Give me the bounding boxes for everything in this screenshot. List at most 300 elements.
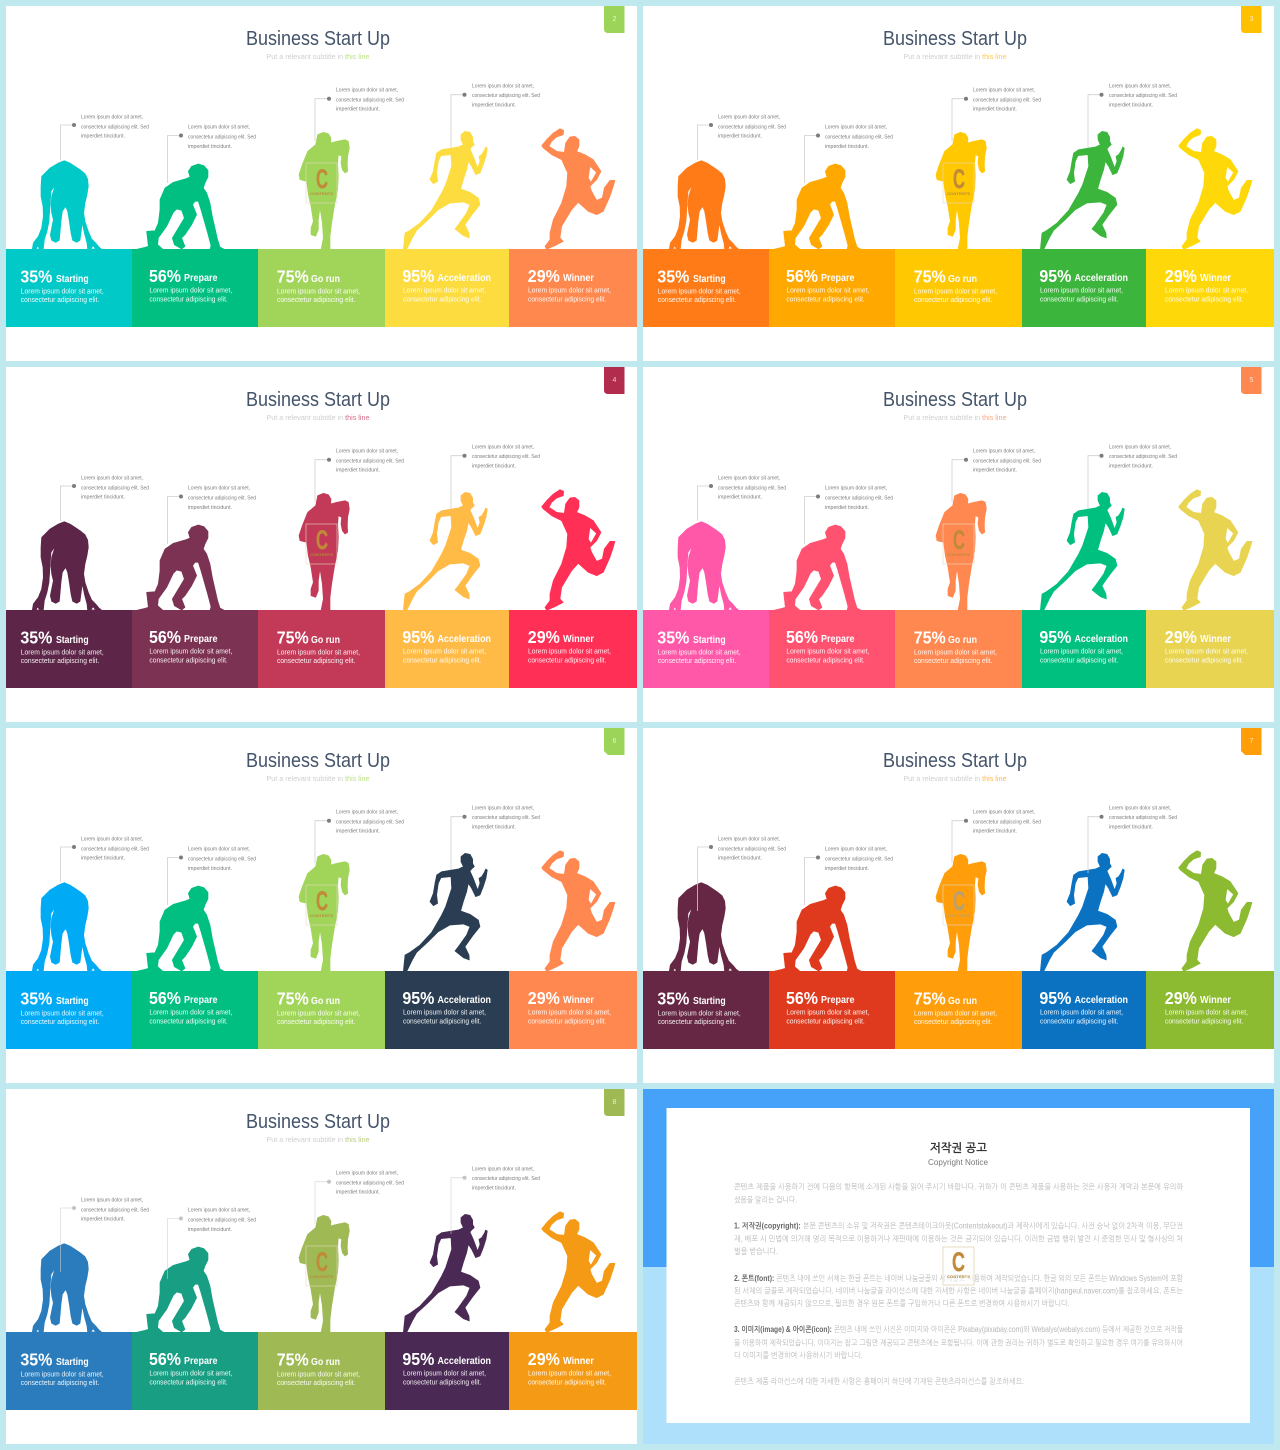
callout 4: imperdiet tincidunt. <box>472 825 516 831</box>
callout 4: Lorem ipsum dolor sit amet, <box>1109 84 1171 90</box>
callout 3: consectetur adipiscing elit. Sed <box>973 98 1041 104</box>
icon: front running figure <box>299 854 349 972</box>
subtitle: Put a relevant subtitle in this line <box>266 415 370 422</box>
stat: 75% Go run: 75% <box>914 267 946 287</box>
icon: front running figure <box>936 493 986 611</box>
icon: preparing runner <box>135 886 225 972</box>
callout 3: consectetur adipiscing elit. Sed <box>973 820 1041 826</box>
watermark: CONTENTS <box>947 1274 970 1279</box>
stat: 35% Starting: consectetur adipiscing elit. <box>658 1019 736 1026</box>
stat: 29% Winner: Winner <box>563 994 594 1006</box>
watermark: CONTENTS <box>310 913 333 918</box>
stat: 56% Prepare: Lorem ipsum dolor sit amet, <box>786 1010 869 1017</box>
text block: copyright clause: 재, 배포 시 민법에 의거해 영리 목적으로 이용하거나 재판매에 이용하는 것은 금지되어 있습니다. 이러한 금법 행위 발견 시 준엄한 민사 및 형사상의 처 <box>734 1235 1183 1244</box>
stat: 35% Starting: Lorem ipsum dolor sit amet, <box>658 288 741 295</box>
text block: intro: 콘텐츠 제품을 사용하기 전에 다음의 항목에 소개된 사항을 읽어 주시기 바랍니다. 귀하가 이 콘텐츠 제품을 사용하는 것은 사용자 계약과 본문에 유의하 <box>734 1182 1183 1192</box>
text block: image clause <box>734 1325 1183 1360</box>
icon: preparing runner <box>135 164 225 250</box>
page tab <box>1241 6 1262 33</box>
callout 4 <box>1088 444 1177 512</box>
stat: 95% Acceleration <box>385 971 509 1049</box>
watermark: C <box>316 1247 328 1277</box>
page tab: 2 <box>613 16 617 23</box>
stat: 75% Go run: consectetur adipiscing elit. <box>277 1380 355 1387</box>
callout 2: consectetur adipiscing elit. Sed <box>825 496 893 502</box>
stat: 56% Prepare: Prepare <box>821 272 855 284</box>
panel: slide 8 <box>6 1089 637 1444</box>
panel: copyright notice <box>643 1089 1274 1444</box>
text block: font clause: 콘텐츠와 함께 제공되지 않으므로, 필요한 경우 원본 폰트를 구입하거나 다른 폰트로 변경하여 사용하시기 바랍니다. <box>734 1299 1070 1308</box>
icon: winner figure <box>542 851 615 971</box>
stat: 35% Starting: consectetur adipiscing elit. <box>658 297 736 304</box>
title: Business Start Up <box>246 389 390 411</box>
text block: copyright clause: 1. 저작권(copyright): 본문 콘텐츠의 소유 및 저작권은 콘텐츠테이크아웃(Contentstakeout)과 제작사에게 있습니다. 사전 승낙 없이 2차적 이용, 무단전 <box>734 1221 1183 1230</box>
text block: font clause: 된 서체의 글꼴로 제작되었습니다. 네이버 나눔글꼴 라이선스에 대한 자세한 사항은 네이버 나눔글꼴 홈페이지(hangeul.naver.com)를 참조하세요. 폰트는 <box>734 1287 1183 1296</box>
stat: 56% Prepare: 56% <box>786 988 818 1008</box>
callout 3 <box>952 448 1041 502</box>
icon: sprinting figure <box>1040 131 1124 250</box>
stat: 75% Go run: Lorem ipsum dolor sit amet, <box>277 288 360 295</box>
stat: 56% Prepare: 56% <box>149 988 181 1008</box>
icon: preparing runner <box>772 886 862 972</box>
title: Business Start Up <box>883 28 1027 50</box>
subtitle: Put a relevant subtitle in this line <box>904 415 1007 422</box>
stat: 56% Prepare <box>132 971 258 1049</box>
callout 3 <box>315 810 404 863</box>
stat: 56% Prepare: Prepare <box>184 1355 218 1367</box>
stat: 56% Prepare: Lorem ipsum dolor sit amet, <box>149 1371 232 1378</box>
icon: front running figure <box>299 493 349 611</box>
page tab: 8 <box>613 1099 617 1106</box>
stat: 95% Acceleration: Lorem ipsum dolor sit amet, <box>1040 649 1123 656</box>
stat: 75% Go run <box>895 610 1022 688</box>
callout 1: Lorem ipsum dolor sit amet, <box>81 475 143 481</box>
watermark <box>943 524 974 564</box>
watermark <box>306 524 337 564</box>
stat: 75% Go run: consectetur adipiscing elit. <box>914 658 992 665</box>
callout 2: Lorem ipsum dolor sit amet, <box>188 1208 250 1214</box>
callout 4: Lorem ipsum dolor sit amet, <box>472 1166 534 1172</box>
callout 1: consectetur adipiscing elit. Sed <box>718 485 786 491</box>
callout 3 <box>315 1170 404 1224</box>
callout 3 <box>315 448 404 502</box>
callout 2: Lorem ipsum dolor sit amet, <box>825 847 887 853</box>
stat: 29% Winner: consectetur adipiscing elit. <box>528 657 606 664</box>
stat: 75% Go run: consectetur adipiscing elit. <box>914 297 992 304</box>
callout 4: consectetur adipiscing elit. Sed <box>1109 454 1177 460</box>
stat: 95% Acceleration: consectetur adipiscing elit. <box>403 1379 481 1386</box>
stat: 95% Acceleration <box>385 249 509 327</box>
callout 4: imperdiet tincidunt. <box>1109 103 1153 109</box>
icon: sprinting figure <box>403 853 487 972</box>
stat: 95% Acceleration: Lorem ipsum dolor sit amet, <box>403 649 486 656</box>
callout 2: consectetur adipiscing elit. Sed <box>188 496 256 502</box>
stat: 75% Go run: Lorem ipsum dolor sit amet, <box>277 649 360 656</box>
callout 3: imperdiet tincidunt. <box>973 107 1017 113</box>
stat: 75% Go run <box>258 971 385 1049</box>
page tab: 5 <box>1250 377 1254 384</box>
stat: 95% Acceleration: 95% <box>402 627 435 647</box>
page tab: 6 <box>613 738 617 745</box>
watermark <box>306 1246 337 1286</box>
title: Business Start Up <box>246 1111 390 1133</box>
callout 4: Lorem ipsum dolor sit amet, <box>472 84 534 90</box>
icon: crouching runner <box>669 161 739 250</box>
stat: 29% Winner: consectetur adipiscing elit. <box>528 296 606 303</box>
stat: 75% Go run: Lorem ipsum dolor sit amet, <box>277 1010 360 1017</box>
callout 1: imperdiet tincidunt. <box>718 134 762 140</box>
watermark: CONTENTS <box>310 1274 333 1279</box>
text block: font clause <box>734 1274 1183 1308</box>
stat: 35% Starting <box>6 249 132 327</box>
stat: 56% Prepare: consectetur adipiscing elit. <box>786 296 865 303</box>
callout 1: consectetur adipiscing elit. Sed <box>718 124 786 130</box>
text block: image clause: 을 이용하여 제작되었습니다. 이미지는 참고 그림만 제공되고 콘텐츠에는 포함됩니다. 이에 관한 권리는 귀하가 별도로 확인하고 필요한 경우 여기를 유의하시어 <box>734 1339 1183 1348</box>
watermark <box>306 163 337 203</box>
stat: 75% Go run <box>895 249 1022 327</box>
callout 2: imperdiet tincidunt. <box>188 1227 232 1233</box>
icon: front running figure <box>299 1215 349 1333</box>
stat: 95% Acceleration: Acceleration <box>438 633 491 645</box>
subtitle: Put a relevant subtitle in this line <box>266 54 370 61</box>
stat: 29% Winner: Lorem ipsum dolor sit amet, <box>1165 288 1248 295</box>
stat: 95% Acceleration <box>1022 249 1146 327</box>
stat: 75% Go run: Go run <box>311 273 340 285</box>
text block: image clause: 다 이미지를 변경하여 사용하시기 바랍니다. <box>734 1351 862 1360</box>
stat: 95% Acceleration: consectetur adipiscing elit. <box>1040 1018 1118 1025</box>
heading: Copyright Notice: Copyright Notice <box>928 1157 988 1167</box>
stat: 56% Prepare <box>132 1332 258 1410</box>
callout 3: imperdiet tincidunt. <box>973 829 1017 835</box>
callout 1: consectetur adipiscing elit. Sed <box>81 1207 149 1213</box>
callout 3: consectetur adipiscing elit. Sed <box>336 458 404 464</box>
callout 1: consectetur adipiscing elit. Sed <box>81 124 149 130</box>
callout 2: imperdiet tincidunt. <box>825 505 869 511</box>
page tab: 4 <box>613 377 617 384</box>
stat: 29% Winner: Winner <box>1200 633 1231 645</box>
stat: 35% Starting: Lorem ipsum dolor sit amet, <box>21 649 104 656</box>
stat: 29% Winner <box>1146 249 1274 327</box>
callout 4: consectetur adipiscing elit. Sed <box>472 454 540 460</box>
callout 2: imperdiet tincidunt. <box>825 144 869 150</box>
callout 1: consectetur adipiscing elit. Sed <box>81 846 149 852</box>
callout 4 <box>1088 806 1177 873</box>
page tab <box>1241 728 1262 755</box>
stat: 56% Prepare: Prepare <box>184 994 218 1006</box>
icon: crouching runner <box>669 522 739 611</box>
callout 3: consectetur adipiscing elit. Sed <box>336 1180 404 1186</box>
stat: 29% Winner: Lorem ipsum dolor sit amet, <box>528 649 611 656</box>
stat: 29% Winner <box>1146 971 1274 1049</box>
stat: 56% Prepare: consectetur adipiscing elit. <box>786 1018 865 1025</box>
stat: 95% Acceleration: Acceleration <box>438 272 491 284</box>
callout 3: Lorem ipsum dolor sit amet, <box>336 448 398 454</box>
stat: 75% Go run: Go run <box>948 634 977 646</box>
stat: 35% Starting: consectetur adipiscing elit. <box>21 658 99 665</box>
stat: 35% Starting <box>6 971 132 1049</box>
watermark: C <box>953 525 965 555</box>
stat: 95% Acceleration: Acceleration <box>438 994 491 1006</box>
stat: 29% Winner: 29% <box>528 1349 560 1369</box>
stat: 56% Prepare: Lorem ipsum dolor sit amet, <box>149 649 232 656</box>
callout 1: Lorem ipsum dolor sit amet, <box>81 1197 143 1203</box>
icon: winner figure <box>542 490 615 610</box>
stat: 35% Starting: 35% <box>657 628 690 648</box>
watermark: C <box>952 1247 965 1277</box>
callout 2 <box>168 486 256 544</box>
stat: 95% Acceleration: Lorem ipsum dolor sit amet, <box>403 1010 486 1017</box>
callout 3 <box>952 810 1041 863</box>
icon: winner figure <box>542 1212 615 1332</box>
panel: slide 2 <box>6 6 637 361</box>
text block: image clause: 3. 이미지(image) & 아이콘(icon): 콘텐츠 내에 쓰인 사진은 이미지와 아이콘은 Pixabay(pixabay.com)와 Webalys(webalys.com) 등에서 제공한 것으로 저작물 <box>734 1325 1183 1334</box>
stat: 56% Prepare: 56% <box>149 1349 181 1369</box>
icon: crouching runner <box>32 161 102 250</box>
callout 1: imperdiet tincidunt. <box>718 856 762 862</box>
watermark <box>943 1247 974 1285</box>
stat: 75% Go run: 75% <box>277 1350 309 1370</box>
watermark: C <box>953 886 965 916</box>
stat: 35% Starting: Lorem ipsum dolor sit amet, <box>658 1010 741 1017</box>
stat: 56% Prepare <box>769 971 895 1049</box>
callout 2: consectetur adipiscing elit. Sed <box>188 135 256 141</box>
stat: 95% Acceleration: 95% <box>402 1349 435 1369</box>
stat: 56% Prepare: Lorem ipsum dolor sit amet, <box>149 1010 232 1017</box>
stat: 56% Prepare: 56% <box>149 627 181 647</box>
stat: 75% Go run: 75% <box>277 267 309 287</box>
stat: 95% Acceleration <box>385 610 509 688</box>
stat: 35% Starting: Starting <box>693 273 726 285</box>
stat: 95% Acceleration: 95% <box>1039 627 1072 647</box>
callout 1: Lorem ipsum dolor sit amet, <box>718 475 780 481</box>
subtitle: Put a relevant subtitle in this line <box>266 1137 370 1144</box>
title: Business Start Up <box>883 750 1027 772</box>
icon: front running figure <box>936 854 986 972</box>
stat: 29% Winner: consectetur adipiscing elit. <box>528 1018 606 1025</box>
stat: 29% Winner: consectetur adipiscing elit. <box>1165 1018 1243 1025</box>
watermark <box>306 885 337 925</box>
stat: 95% Acceleration: consectetur adipiscing elit. <box>1040 657 1118 664</box>
stat: 35% Starting: Starting <box>56 634 89 646</box>
watermark: CONTENTS <box>310 191 333 196</box>
icon: crouching runner <box>669 883 739 972</box>
callout 4: imperdiet tincidunt. <box>472 1186 516 1192</box>
callout 1 <box>698 114 786 160</box>
stat: 95% Acceleration: consectetur adipiscing elit. <box>403 1018 481 1025</box>
icon: crouching runner <box>32 1244 102 1333</box>
stat: 75% Go run: Go run <box>311 634 340 646</box>
stat: 35% Starting: Lorem ipsum dolor sit amet, <box>658 649 741 656</box>
stat: 29% Winner: Winner <box>1200 272 1231 284</box>
stat: 56% Prepare: consectetur adipiscing elit. <box>149 657 228 664</box>
text block: copyright clause: 벌을 받습니다. <box>734 1247 778 1256</box>
callout 3: imperdiet tincidunt. <box>336 829 380 835</box>
stat: 75% Go run: Lorem ipsum dolor sit amet, <box>914 1010 997 1017</box>
stat: 29% Winner: Lorem ipsum dolor sit amet, <box>1165 1010 1248 1017</box>
stat: 95% Acceleration: consectetur adipiscing elit. <box>403 657 481 664</box>
callout 2: imperdiet tincidunt. <box>188 505 232 511</box>
callout 4: consectetur adipiscing elit. Sed <box>1109 815 1177 821</box>
stat: 35% Starting: Starting <box>56 273 89 285</box>
stat: 56% Prepare: Lorem ipsum dolor sit amet, <box>786 649 869 656</box>
callout 2 <box>168 125 256 183</box>
stat: 95% Acceleration: Acceleration <box>1074 272 1128 284</box>
panel: slide 7 <box>643 728 1274 1083</box>
stat: 75% Go run: consectetur adipiscing elit. <box>277 297 355 304</box>
callout 3: imperdiet tincidunt. <box>336 107 380 113</box>
text block: closing note: 콘텐츠 제품 라이선스에 대한 자세한 사항은 홈페이지 하단에 기재된 콘텐츠라이선스를 참조하세요. <box>734 1377 1024 1386</box>
watermark: C <box>316 525 328 555</box>
stat: 75% Go run: Go run <box>311 1356 340 1368</box>
stat: 29% Winner: Lorem ipsum dolor sit amet, <box>528 1010 611 1017</box>
icon: preparing runner <box>135 1247 225 1333</box>
callout 2 <box>168 847 256 905</box>
panel: slide 5 <box>643 367 1274 722</box>
stat: 56% Prepare: consectetur adipiscing elit. <box>149 296 228 303</box>
stat: 29% Winner: 29% <box>1165 988 1197 1008</box>
stat: 95% Acceleration <box>1022 610 1146 688</box>
callout 1: consectetur adipiscing elit. Sed <box>718 846 786 852</box>
panel: slide 3 <box>643 6 1274 361</box>
stat: 56% Prepare: Prepare <box>184 633 218 645</box>
callout 2 <box>804 125 893 183</box>
stat: 75% Go run: Lorem ipsum dolor sit amet, <box>914 649 997 656</box>
stat: 29% Winner: Lorem ipsum dolor sit amet, <box>1165 649 1248 656</box>
icon: sprinting figure <box>403 1214 487 1333</box>
callout 2: imperdiet tincidunt. <box>188 866 232 872</box>
callout 3: Lorem ipsum dolor sit amet, <box>336 810 398 816</box>
icon: sprinting figure <box>1040 853 1124 972</box>
stat: 75% Go run: Lorem ipsum dolor sit amet, <box>277 1371 360 1378</box>
callout 1: imperdiet tincidunt. <box>81 495 125 501</box>
stat: 95% Acceleration: consectetur adipiscing elit. <box>403 296 481 303</box>
stat: 75% Go run <box>258 1332 385 1410</box>
callout 4 <box>451 84 540 151</box>
stat: 75% Go run: Go run <box>311 995 340 1007</box>
icon: preparing runner <box>772 164 862 250</box>
stat: 35% Starting <box>6 1332 132 1410</box>
callout 2: consectetur adipiscing elit. Sed <box>825 857 893 863</box>
heading: Korean title: 저작권 공고 <box>930 1141 988 1155</box>
subtitle: Put a relevant subtitle in this line <box>904 54 1007 61</box>
callout 2 <box>168 1208 256 1279</box>
page tab: 7 <box>1250 738 1254 745</box>
stat: 29% Winner <box>1146 610 1274 688</box>
stat: 35% Starting <box>643 249 769 327</box>
stat: 56% Prepare: 56% <box>786 266 818 286</box>
callout 1: Lorem ipsum dolor sit amet, <box>81 836 143 842</box>
stat: 35% Starting: Starting <box>693 634 726 646</box>
stat: 75% Go run <box>258 249 385 327</box>
callout 2: Lorem ipsum dolor sit amet, <box>188 847 250 853</box>
stat: 35% Starting: Starting <box>56 995 89 1007</box>
stat: 29% Winner: Lorem ipsum dolor sit amet, <box>528 1371 611 1378</box>
callout 4: Lorem ipsum dolor sit amet, <box>472 806 534 812</box>
stat: 75% Go run: consectetur adipiscing elit. <box>277 658 355 665</box>
callout 4: consectetur adipiscing elit. Sed <box>472 93 540 99</box>
callout 1: Lorem ipsum dolor sit amet, <box>718 114 780 120</box>
stat: 29% Winner: Lorem ipsum dolor sit amet, <box>528 288 611 295</box>
stat: 56% Prepare: 56% <box>149 266 181 286</box>
stat: 35% Starting: 35% <box>20 267 53 287</box>
stat: 95% Acceleration: 95% <box>1039 988 1072 1008</box>
callout 4: consectetur adipiscing elit. Sed <box>472 1176 540 1182</box>
stat: 75% Go run: consectetur adipiscing elit. <box>277 1019 355 1026</box>
stat: 75% Go run <box>895 971 1022 1049</box>
stat: 56% Prepare: Lorem ipsum dolor sit amet, <box>149 288 232 295</box>
stat: 56% Prepare <box>769 249 895 327</box>
callout 4 <box>451 444 540 512</box>
icon: crouching runner <box>32 883 102 972</box>
stat: 75% Go run: Lorem ipsum dolor sit amet, <box>914 288 997 295</box>
callout 1: Lorem ipsum dolor sit amet, <box>81 114 143 120</box>
stat: 95% Acceleration: Lorem ipsum dolor sit amet, <box>403 288 486 295</box>
callout 1 <box>60 114 149 160</box>
watermark: CONTENTS <box>947 913 970 918</box>
icon: sprinting figure <box>1040 492 1124 611</box>
callout 3: imperdiet tincidunt. <box>973 468 1017 474</box>
stat: 29% Winner <box>509 249 637 327</box>
text block: font clause: 2. 폰트(font): 콘텐츠 내에 쓰인 서체는 한글 폰트는 네이버 나눔글꼴의 서체들로 사용하여 제작되었습니다. 한글 외의 모든 폰트는 Windows System에 포함 <box>734 1274 1183 1283</box>
stat: 56% Prepare: Lorem ipsum dolor sit amet, <box>786 288 869 295</box>
watermark: C <box>316 164 328 194</box>
stat: 29% Winner: 29% <box>528 627 560 647</box>
stat: 35% Starting: consectetur adipiscing elit. <box>21 1019 99 1026</box>
callout 4: Lorem ipsum dolor sit amet, <box>1109 444 1171 450</box>
callout 1: imperdiet tincidunt. <box>81 1217 125 1223</box>
stat: 56% Prepare <box>132 249 258 327</box>
title: Business Start Up <box>883 389 1027 411</box>
stat: 95% Acceleration: Acceleration <box>1074 994 1128 1006</box>
title: Business Start Up <box>246 750 390 772</box>
callout 3 <box>315 88 404 141</box>
watermark <box>943 885 974 925</box>
callout 4: imperdiet tincidunt. <box>472 464 516 470</box>
stat: 75% Go run: 75% <box>914 628 946 648</box>
callout 2: Lorem ipsum dolor sit amet, <box>825 486 887 492</box>
page tab <box>604 367 624 394</box>
watermark: CONTENTS <box>947 552 970 557</box>
stat: 35% Starting: Lorem ipsum dolor sit amet, <box>21 1371 104 1378</box>
icon: sprinting figure <box>403 131 487 250</box>
callout 4: Lorem ipsum dolor sit amet, <box>1109 806 1171 812</box>
watermark: CONTENTS <box>310 552 333 557</box>
stat: 75% Go run: consectetur adipiscing elit. <box>914 1019 992 1026</box>
callout 3: Lorem ipsum dolor sit amet, <box>336 1170 398 1176</box>
callout 1: imperdiet tincidunt. <box>81 134 125 140</box>
page tab <box>1241 367 1262 394</box>
stat: 95% Acceleration <box>1022 971 1146 1049</box>
callout 3: Lorem ipsum dolor sit amet, <box>973 810 1035 816</box>
callout 2: consectetur adipiscing elit. Sed <box>188 1218 256 1224</box>
callout 1 <box>60 836 149 882</box>
icon: preparing runner <box>772 525 862 611</box>
callout 1: Lorem ipsum dolor sit amet, <box>718 836 780 842</box>
stat: 29% Winner <box>509 971 637 1049</box>
page tab: 3 <box>1250 16 1254 23</box>
stat: 29% Winner: 29% <box>1165 266 1197 286</box>
stat: 35% Starting: consectetur adipiscing elit. <box>21 1380 99 1387</box>
stat: 95% Acceleration: 95% <box>402 988 435 1008</box>
callout 2: Lorem ipsum dolor sit amet, <box>825 125 887 131</box>
callout 4 <box>451 1166 540 1234</box>
callout 2: consectetur adipiscing elit. Sed <box>825 135 893 141</box>
stat: 29% Winner: consectetur adipiscing elit. <box>528 1379 606 1386</box>
stat: 35% Starting: 35% <box>20 628 53 648</box>
callout 2: imperdiet tincidunt. <box>825 866 869 872</box>
stat: 56% Prepare: Prepare <box>821 633 855 645</box>
stat: 95% Acceleration: Lorem ipsum dolor sit amet, <box>1040 1010 1123 1017</box>
